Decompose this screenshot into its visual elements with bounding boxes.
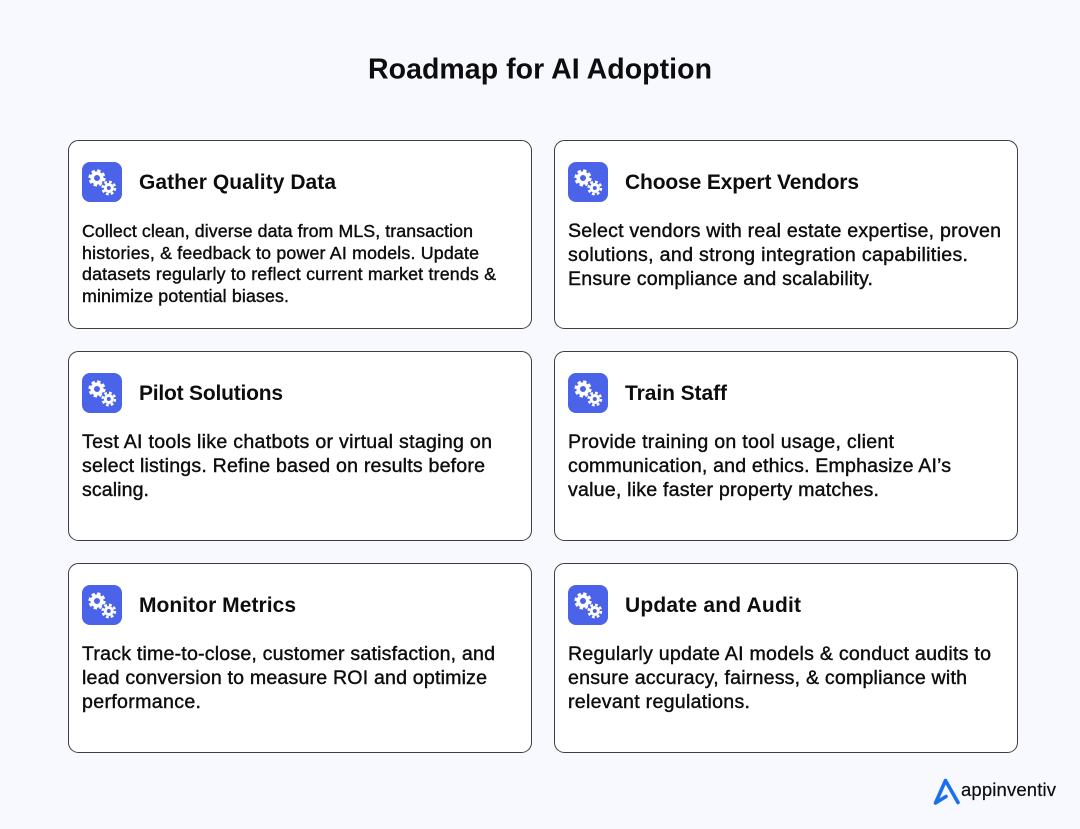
body text: histories, & feedback to power AI models. Update [82,243,479,263]
body text: solutions, and strong integration capabilities. [568,244,968,266]
panel: pilot solutions [68,352,532,540]
body text: Test AI tools like chatbots or virtual staging on [82,431,492,453]
body text [568,220,1001,290]
icon: gears [568,373,608,413]
body text: minimize potential biases. [82,286,289,306]
panel: update and audit [554,564,1018,752]
icon: gears [568,162,608,202]
body text: value, like faster property matches. [568,479,879,501]
heading: Update and Audit [625,594,801,617]
panel: train staff [554,352,1018,540]
body text [568,643,991,713]
heading: Pilot Solutions [139,382,283,405]
body text: ensure accuracy, fairness, & compliance with [568,667,967,689]
icon: gears [82,585,122,625]
body text: Collect clean, diverse data from MLS, transaction [82,221,473,241]
panel: monitor metrics [68,564,532,752]
body text [82,431,492,501]
body text: select listings. Refine based on results before [82,455,485,477]
logo: appinventiv [936,779,1057,803]
heading: Choose Expert Vendors [625,171,859,194]
body text: datasets regularly to reflect current market trends & [82,264,496,284]
body text: scaling. [82,479,149,501]
body text: Provide training on tool usage, client [568,431,895,453]
panel: choose expert vendors [554,140,1018,328]
icon: gears [568,585,608,625]
body text: Regularly update AI models & conduct audits to [568,643,991,665]
heading: Gather Quality Data [139,171,336,194]
body text: Ensure compliance and scalability. [568,268,873,290]
logo wordmark: appinventiv [961,779,1057,800]
heading: Train Staff [625,382,728,405]
body text [82,643,495,713]
body text [82,221,496,306]
icon: logo mark [936,780,958,803]
body text: Track time-to-close, customer satisfaction, and [82,643,495,665]
icon: gears [82,373,122,413]
body text: relevant regulations. [568,691,750,713]
heading: Monitor Metrics [139,594,296,617]
body text [568,431,951,501]
body text: communication, and ethics. Emphasize AI’s [568,455,951,477]
title: Roadmap for AI Adoption [368,54,712,86]
body text: Select vendors with real estate expertise, proven [568,220,1001,242]
body text: lead conversion to measure ROI and optimize [82,667,487,689]
body text: performance. [82,691,201,713]
icon: gears [82,162,122,202]
panel: gather quality data [68,140,532,328]
